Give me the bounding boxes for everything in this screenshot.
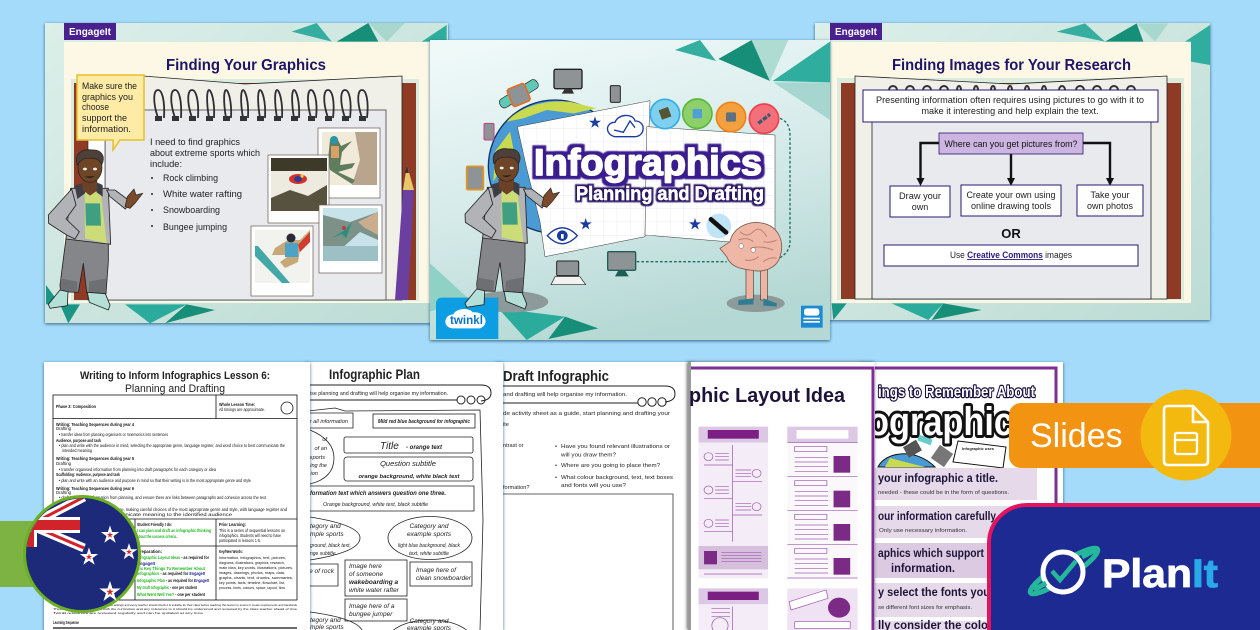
photo: white water rafting — [268, 155, 329, 223]
small icons: stars, cloud, eye, wrench — [547, 115, 731, 244]
arrows: flowchart — [916, 143, 1114, 186]
poster rows — [875, 468, 1037, 630]
lesson plan text: Writing: Teaching Sequences during year 6 — [56, 486, 135, 491]
poster art — [878, 435, 1006, 468]
character: boy presenter — [48, 150, 143, 310]
lesson plan text: participated in lessons 1-5. — [219, 538, 261, 543]
document: infographic plan — [305, 362, 503, 630]
badge: EngageIt — [830, 23, 882, 40]
draft text: and drafting will help organise my information. — [503, 392, 627, 398]
lesson plan text: I can plan and draft an infographic thinking — [137, 528, 211, 533]
plan box text: Image here of — [416, 567, 457, 574]
document: things to remember poster — [860, 362, 1063, 630]
draft text: Have you found relevant illustrations or — [561, 444, 670, 450]
lesson plan text: Six Key Things To Remember About — [137, 566, 206, 571]
plan heading: Infographic Plan — [329, 366, 420, 382]
lesson plan text: Scaffolding: Audience, purpose and task — [56, 472, 120, 477]
title: Finding Your Graphics — [166, 57, 326, 74]
poster art: Infographic uses — [962, 446, 995, 451]
badge: EngageIt: EngageIt — [835, 27, 878, 38]
lesson plan table — [53, 395, 297, 600]
box: online drawing tools: Create your own using — [966, 190, 1056, 200]
plan box text: of someone — [349, 571, 383, 578]
poster rows: our information carefully. — [878, 511, 998, 523]
plan box text: ion — [311, 471, 318, 477]
plan box text: formation text which answers question one three. — [310, 490, 446, 497]
devices — [467, 69, 636, 285]
plan box text: sports — [310, 455, 325, 461]
lesson plan text: about the success criteria. — [137, 534, 177, 539]
pencil — [395, 165, 414, 300]
lesson plan text: graphs, charts, text, chunks, summaries, — [219, 575, 293, 580]
lesson plan text: • plan and write with an audience and purpose in mind so that their writing is in the most appropriate genre and style — [59, 478, 252, 483]
lesson plan text: Student Friendly I do: — [137, 522, 172, 527]
lesson plan text: Please note: This resource is for use in school settings and every teacher should check it is suitable for their class before teaching this lesson to ensure it meets requirements and standards — [53, 603, 297, 607]
lesson plan text: intended meaning — [62, 448, 93, 453]
text: twinkl: twinkl — [450, 313, 483, 327]
plan box text: light blue background, black — [398, 543, 460, 549]
plan box text: ing the — [310, 463, 327, 469]
icon: New Zealand flag badge — [20, 495, 140, 612]
plan box text: Mild red blue background for infographic — [378, 419, 471, 425]
lesson plan text: My Draft Infographic - one per student — [137, 585, 197, 590]
plan box text: Image here — [349, 563, 382, 570]
plan box text: e of rock — [309, 568, 335, 575]
plan box text: tegory and — [310, 617, 341, 624]
draft text: ntrast or — [503, 443, 524, 449]
draft text: formation? — [503, 485, 529, 491]
badges — [650, 99, 779, 133]
text box: intro: Presenting information often requires using pictures to go with it to — [876, 95, 1144, 105]
lesson plan text — [53, 402, 297, 625]
draft banner — [503, 386, 675, 406]
lesson plan text: Writing: Teaching Sequences during year 4 — [56, 422, 135, 427]
plan box text: - orange text — [406, 445, 443, 451]
paper book — [517, 101, 775, 257]
plan box text: Image here of a — [349, 603, 395, 610]
text block: extreme sports list: I need to find graphics — [150, 137, 240, 147]
plan box text: for all information — [305, 419, 348, 425]
banner: Slides — [1009, 390, 1260, 480]
shadows — [472, 291, 548, 312]
lesson plan text: word choice that communicate meaning to the identified audience — [62, 512, 233, 517]
text box: intro — [863, 90, 1158, 122]
photo: bungee jumping — [319, 205, 382, 273]
text block: extreme sports list: about extreme sports which — [150, 148, 260, 158]
poster rows: aphics which support — [878, 548, 984, 560]
box: online drawing tools — [961, 185, 1061, 216]
panel: PlanIt logo — [989, 505, 1260, 630]
plan box text: orange background, white black text — [358, 474, 461, 480]
draft text: ite — [503, 422, 509, 428]
poster rows: information. — [891, 563, 955, 575]
draft text: will you draw them? — [560, 452, 616, 458]
lesson plan text: Twinkl resources are reviewed regularly and can be updated at any time — [53, 611, 204, 615]
panel: slide Finding Your Graphics — [45, 23, 448, 323]
poster title: ographic — [868, 400, 1013, 444]
lesson plan text: • draft texts using information from planning, and ensure there are links between paragraphs and cohesion across the text — [59, 495, 267, 500]
slide corner triangles — [46, 23, 447, 323]
title slide artwork — [430, 40, 830, 340]
lesson plan text: What Went Well Yes? - one per student — [137, 592, 205, 597]
box: online drawing tools: online drawing tools — [971, 201, 1051, 211]
lesson plan text: Drafting — [56, 461, 72, 466]
dotted connector — [637, 118, 790, 262]
lesson plan text: images, drawings, photos, maps, data, — [219, 570, 285, 575]
plan box text: Title — [380, 441, 399, 452]
lesson plan text: diagrams, illustrations, graphics, research, — [219, 560, 285, 565]
document: my draft infographic — [495, 362, 695, 630]
photo: snowboarding — [251, 226, 313, 296]
plan box text: Category and — [409, 618, 449, 625]
plan boxes — [310, 413, 475, 630]
lesson plan text: This is a series of sequential lessons on — [219, 528, 286, 533]
plan box text: nge subtitle — [310, 551, 336, 557]
logo: teacher badge — [801, 306, 823, 328]
lesson plan text: Infographic Layout Ideas - as required for — [137, 555, 209, 560]
text block: extreme sports list: include: — [150, 159, 182, 169]
lesson plan text: Learning Sequence — [53, 620, 79, 625]
draft text — [503, 392, 673, 491]
title: Infographics: Infographics — [534, 142, 762, 183]
lesson plan text: Information, infographics, text, pictures, — [219, 555, 286, 560]
lesson plan text: Prior Learning: — [219, 522, 246, 527]
draft text: and fonts will you use? — [561, 483, 626, 489]
draft text: What colour background, text, text boxes — [561, 475, 673, 481]
document: lesson plan — [44, 362, 310, 630]
poster rows: Only use necessary information. — [879, 528, 968, 534]
plan box text: example sports — [407, 531, 452, 538]
callout: graphics tip — [77, 75, 144, 150]
box: draw your own: Draw your — [899, 191, 941, 201]
box: creative commons: Use Creative Commons images — [950, 250, 1073, 260]
box: take your own photos: own photos — [1087, 201, 1133, 211]
plan box text: ground, black text, — [310, 543, 351, 549]
globe — [488, 100, 622, 233]
poster heading: ings to Remember About — [878, 384, 1035, 401]
text block: extreme sports list — [150, 137, 260, 232]
lesson plan heading: Writing to Inform Infographics Lesson 6: — [80, 370, 270, 382]
lesson plan text: These resources are aligned with the curriculum and any reference to it should be understood and reviewed by the class teacher ahead of time — [53, 607, 297, 611]
badge: EngageIt — [64, 23, 116, 40]
title: Finding Images for Your Research — [892, 57, 1131, 74]
plan outline — [308, 408, 483, 630]
callout: graphics tip: graphics you — [82, 92, 133, 102]
draft text: • — [555, 463, 557, 469]
plan box text — [305, 419, 472, 630]
draft text: de activity sheet as a guide, start planning and drafting your — [503, 411, 670, 417]
draft heading: Draft Infographic — [503, 368, 609, 385]
badge: EngageIt: EngageIt — [69, 27, 112, 38]
draft box — [503, 494, 673, 630]
box: take your own photos: Take your — [1090, 190, 1130, 200]
lesson plan text: Writing: Teaching Sequences during year 5 — [56, 456, 135, 461]
ribbon: green tab — [0, 521, 40, 587]
panel: slide Finding Images for Your Research — [815, 23, 1210, 320]
lesson plan text: Infographics - as required for EngageIt — [137, 571, 205, 576]
logo mark — [1026, 543, 1102, 599]
callout: graphics tip: information. — [82, 124, 131, 134]
text: OR: OR — [1001, 226, 1021, 241]
box: draw your own: own — [912, 202, 928, 212]
text block: extreme sports list: Snowboarding — [163, 205, 220, 215]
lesson plan text: All timings are approximate. — [219, 407, 265, 412]
photo: rock climbing — [318, 128, 380, 198]
plan box text: Question subtitle — [380, 459, 436, 468]
lesson plan text: main idea, key words, illustrations, pictures, — [219, 565, 293, 570]
lesson plan text: Preparation: — [137, 549, 163, 554]
logo: twinkl — [436, 298, 498, 339]
draft text: Where are you going to place them? — [561, 463, 660, 469]
text block: extreme sports list: White water rafting — [163, 189, 242, 199]
lesson plan text: Audience, purpose and task — [56, 438, 101, 443]
notebook — [74, 76, 416, 300]
box: draw your own — [890, 186, 950, 217]
character: brain — [720, 222, 782, 307]
lesson plan text: Key/New Words: — [219, 549, 243, 554]
poster rows: se different font sizes for emphasis. — [878, 605, 973, 611]
lesson plan text: process, fonts, colours, space, layout, flow — [219, 585, 285, 590]
character: boy presenter — [465, 149, 559, 309]
poster rows: your infographic a title. — [878, 473, 998, 485]
lesson plan text: Infographic Plan - as required for EngageIt — [137, 578, 209, 583]
lesson plan text: • plan and write with the audience in mind, selecting the appropriate genre, language register, and word choice to best communicate the — [59, 443, 286, 448]
box: creative commons — [884, 245, 1138, 266]
lesson plan text: EngageIt — [137, 561, 156, 566]
document: infographic plan: ise planning and drafting will help organise my information. — [310, 391, 448, 397]
callout: graphics tip: Make sure the — [82, 81, 137, 91]
lesson plan text: • transfer organised information from planning into draft paragraphs for each category or idea — [59, 467, 217, 472]
panel: title slide Infographics — [430, 40, 830, 340]
lesson plan text: • plan and write with a clear purpose, making careful choices of the most appropriate genre and style, with language register and — [59, 507, 288, 512]
lesson plan text: infographics. Students will need to have — [219, 533, 281, 538]
label: Slides: Slides — [1030, 417, 1123, 455]
plan box text: bungee jumper — [349, 611, 393, 618]
icon: document — [1140, 390, 1232, 480]
text block: extreme sports list: Rock climbing — [163, 173, 218, 183]
text box: intro: make it interesting and help explain the text. — [922, 106, 1098, 116]
lesson plan text: Drafting — [56, 426, 72, 431]
lesson plan text: Phase 3: Composition — [56, 404, 96, 409]
plan box text: Orange background, white text, black subtitle — [323, 502, 428, 508]
slide corner triangles — [832, 23, 1210, 320]
lesson plan text: • transfer ideas from planning organisers or mnemonics into sentences — [59, 432, 168, 437]
cream card — [831, 42, 1191, 303]
plan box text: text, white subtitle — [409, 551, 449, 557]
callout: graphics tip: choose — [82, 102, 109, 112]
box: question — [939, 133, 1083, 154]
cream card — [64, 42, 430, 303]
plan box text: of an — [315, 446, 327, 452]
layout thumbnails — [698, 427, 858, 630]
text block: extreme sports list: Bungee jumping — [163, 222, 227, 232]
subtitle: Planning and Drafting: Planning and Drafting — [576, 183, 764, 205]
poster rows: y select the fonts you — [878, 587, 990, 599]
poster rows: needed - these could be in the form of questions. — [878, 490, 1010, 496]
plan box text: white water rafter — [349, 587, 400, 594]
draft text: • — [555, 475, 557, 481]
plan box text: clean snowboarder — [416, 575, 472, 582]
plan box text: of — [322, 437, 328, 443]
lesson plan text: key points, facts, timeline, flowchart, list, — [219, 580, 285, 585]
lesson plan heading: Planning and Drafting — [125, 383, 225, 395]
lesson plan heading — [80, 370, 270, 395]
plan banner — [310, 385, 491, 404]
plan box text: Category and — [409, 523, 449, 530]
plan box text: wakeboarding a — [349, 579, 399, 586]
layout heading: phic Layout Idea — [689, 385, 846, 407]
document: infographic layout idea — [688, 362, 875, 630]
draft text: • — [555, 444, 557, 450]
lesson plan text: Whole Lesson Time: — [219, 402, 255, 407]
plan box text: mple sports — [310, 531, 344, 538]
teal triangles — [430, 40, 830, 340]
callout: graphics tip: support the — [82, 113, 127, 123]
logo wordmark: PlanIt — [1102, 552, 1218, 596]
notebook — [841, 76, 1181, 299]
box: question: Where can you get pictures from? — [944, 139, 1078, 149]
lesson plan text: Drafting — [56, 490, 72, 495]
plan box text: tegory and — [310, 523, 341, 530]
box: take your own photos — [1077, 185, 1143, 216]
